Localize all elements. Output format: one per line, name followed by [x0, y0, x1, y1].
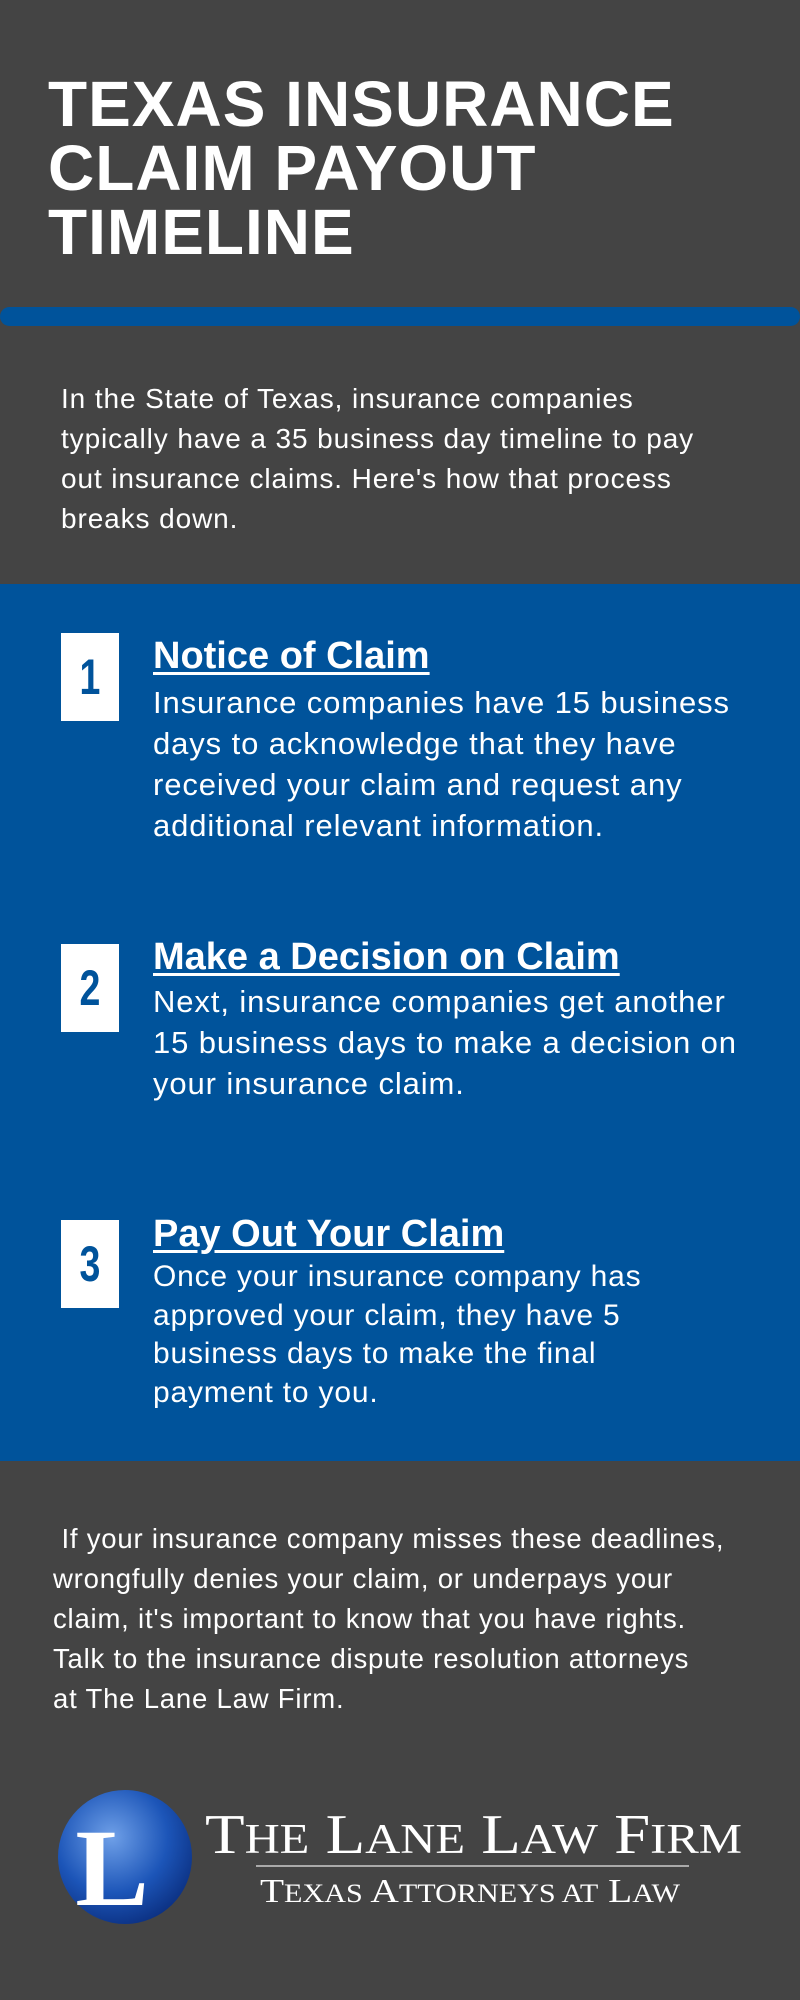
step 2: your insurance claim. — [153, 1066, 465, 1101]
title: TEXAS INSURANCE CLAIM PAYOUT TIMELINE — [48, 68, 675, 268]
step 3: business days to make the final — [153, 1337, 596, 1370]
step 1: received your claim and request any — [153, 767, 682, 802]
blue divider bar — [0, 307, 800, 326]
step 3: approved your claim, they have 5 — [153, 1298, 621, 1332]
number box 3: 3 — [80, 1236, 100, 1292]
closing text — [53, 1523, 724, 1714]
icon: L circle — [58, 1790, 192, 1929]
number box 2: 2 — [80, 960, 100, 1016]
step 3: payment to you. — [153, 1376, 378, 1408]
closing text: Talk to the insurance dispute resolution attorneys — [53, 1643, 689, 1674]
intro text: breaks down. — [61, 503, 238, 534]
closing text: claim, it's important to know that you have rights. — [53, 1603, 686, 1634]
step 3: Pay Out Your Claim — [153, 1213, 504, 1255]
number box 1: 1 — [80, 649, 100, 705]
step 2: 15 business days to make a decision on — [153, 1025, 737, 1060]
step 2: Next, insurance companies get another — [153, 984, 726, 1019]
step 2 — [153, 936, 737, 1101]
logo — [58, 1790, 742, 1929]
intro text: typically have a 35 business day timeline to pay — [61, 423, 694, 454]
tagline: TEXAS ATTORNEYS AT LAW — [260, 1873, 681, 1910]
panel: timeline steps — [0, 584, 800, 1461]
step 1: days to acknowledge that they have — [153, 726, 676, 761]
step 1: Insurance companies have 15 business — [153, 685, 730, 720]
icon: L circle: L — [75, 1807, 149, 1929]
number box 1 — [61, 633, 119, 721]
number box 2 — [61, 944, 119, 1032]
step 2: Make a Decision on Claim — [153, 936, 620, 978]
step 1 — [153, 635, 730, 843]
step 1: Notice of Claim — [153, 635, 430, 677]
step 1: additional relevant information. — [153, 808, 604, 843]
firm name: THE LANE LAW FIRM — [205, 1804, 742, 1866]
step 3 — [153, 1213, 641, 1408]
closing text: If your insurance company misses these deadlines, — [61, 1523, 724, 1554]
intro text: In the State of Texas, insurance companies — [61, 383, 634, 414]
intro text — [61, 383, 694, 534]
closing text: wrongfully denies your claim, or underpays your — [53, 1563, 673, 1594]
closing text: at The Lane Law Firm. — [53, 1683, 344, 1714]
intro text: out insurance claims. Here's how that process — [61, 463, 672, 494]
step 3: Once your insurance company has — [153, 1260, 641, 1293]
number box 3 — [61, 1220, 119, 1308]
